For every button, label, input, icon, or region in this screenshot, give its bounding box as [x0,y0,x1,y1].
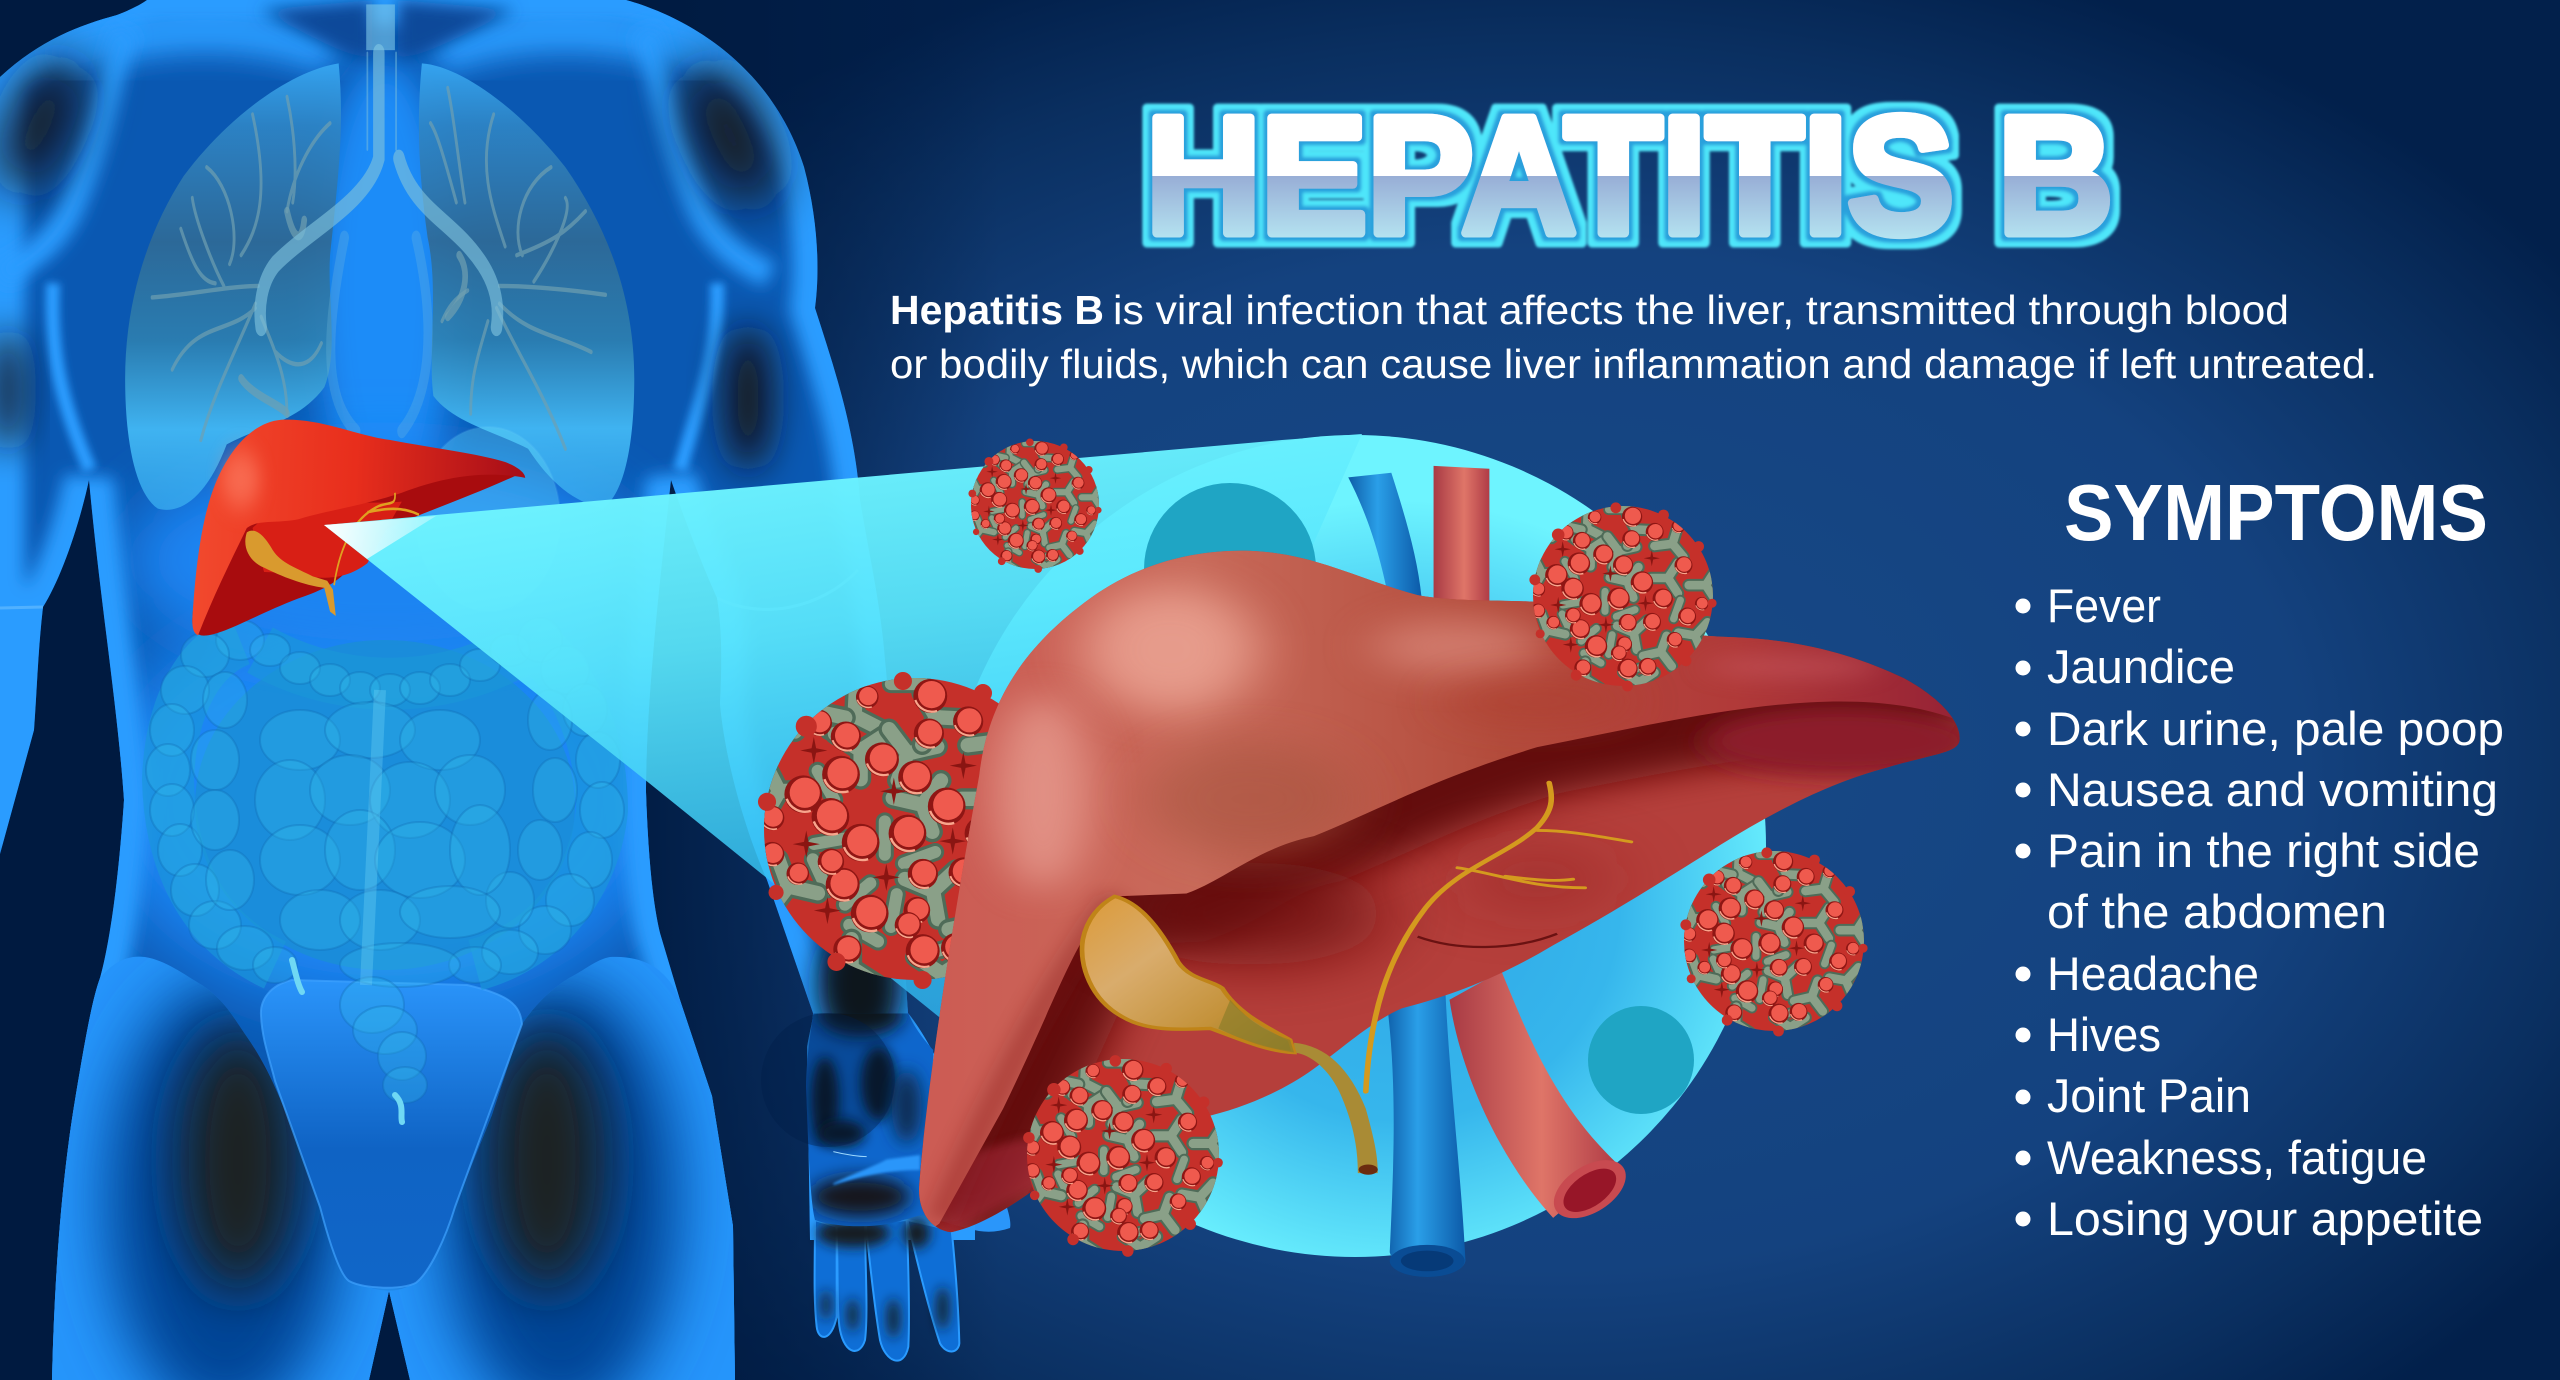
liver top lobe [899,535,1968,1252]
right thigh [389,956,735,1380]
intro text: is viral infection that affects the liver, transmitted through blood [1113,287,2289,333]
intro text [890,287,2377,387]
symptoms list: Losing your appetite [2047,1192,2483,1245]
shoulder shadows [0,46,99,204]
stomach [416,427,560,611]
pelvis shape [261,980,522,1288]
virus upper right [1520,502,1717,700]
small liver on body [192,420,525,636]
lungs [125,4,634,510]
symptoms list: Joint Pain [2047,1069,2251,1122]
symptoms list: Fever [2047,579,2161,632]
symptoms list: Dark urine, pale poop [2047,702,2504,755]
small gallbladder [245,531,336,616]
title: HEPATITIS B [1146,83,2113,269]
intestines [146,618,624,1122]
teal spot right [1588,1006,1694,1114]
vein bottom [1386,994,1465,1275]
gallbladder [1082,896,1378,1175]
symptoms list: Nausea and vomiting [2047,763,2498,816]
symptoms list [2016,579,2504,1245]
body silhouette [0,0,1000,1380]
liver underside [899,535,1976,1252]
artery top [1434,466,1489,604]
intro text: Hepatitis B [890,287,1104,333]
neck shadow [260,0,516,58]
blood vessels bottom [1386,971,1640,1277]
large liver [899,535,1976,1252]
human body [0,0,1010,1380]
trachea and main bronchi [260,53,498,431]
liver top lobe [192,420,525,635]
artery bottom [1450,971,1617,1218]
liver underside [192,458,517,636]
hepatic ducts [1366,783,1631,1092]
zoom beam [324,434,1362,1046]
thumb [950,1190,1010,1232]
palm [806,1013,934,1226]
teal spot upper [1144,483,1316,655]
virus bottom [1013,1055,1223,1265]
virus large left [743,672,1072,1003]
symptoms list: Weakness, fatigue [2047,1131,2427,1184]
dark shadow circle by hand [761,1013,895,1147]
fingers [815,1220,959,1361]
vein top [1348,473,1422,598]
forearm shadow [818,923,902,1047]
right hand and forearm [800,990,959,1361]
symptoms list: Pain in the right side [2047,824,2480,877]
upper-arm fold [0,606,43,610]
bronchial tree [152,88,606,449]
blood vessels top [1348,466,1489,604]
symptoms list: Jaundice [2047,640,2235,693]
symptoms list: Headache [2047,947,2259,1000]
intro text: or bodily fluids, which can cause liver inflammation and damage if left untreated. [890,341,2377,387]
virus top [962,438,1102,579]
left thigh [52,956,389,1380]
symptoms list: of the abdomen [2047,885,2387,938]
symptoms list: Hives [2047,1008,2161,1061]
virus right [1671,847,1868,1044]
cyan magnified disc [944,435,1766,1257]
symptoms heading: SYMPTOMS [2064,468,2488,557]
